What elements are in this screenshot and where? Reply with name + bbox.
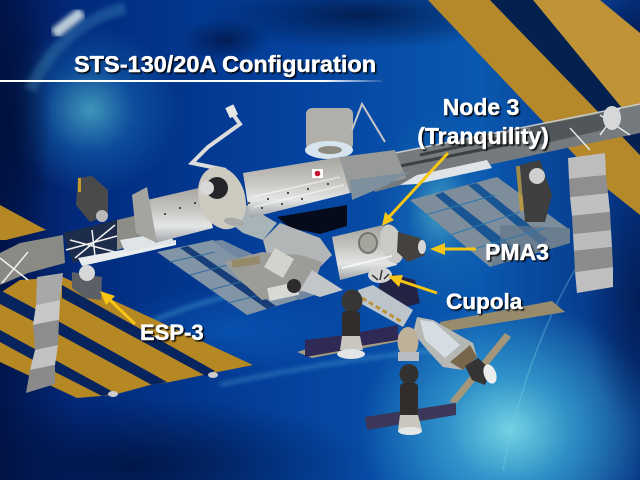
label: ESP-3: ESP-3 [140, 320, 204, 345]
dark structure under Kibo [277, 205, 347, 234]
label: PMA3: PMA3 [485, 239, 549, 265]
robot arm [192, 104, 240, 170]
label: Node 3 (Tranquility): (Tranquility) [417, 123, 549, 149]
radiator panels: left blue-gray [157, 240, 330, 315]
solar array: upper right gold panels [428, 0, 640, 215]
Kibo laboratory with Japanese flag [243, 150, 410, 218]
ESP-3 pallet [72, 265, 102, 300]
radiator: left accordion [26, 273, 63, 393]
arrow: Cupola [388, 275, 437, 293]
arrow: ESP-3 [100, 291, 135, 324]
lower connecting module [217, 203, 277, 240]
camera platform on left truss [76, 176, 108, 222]
arrow: Node 3 [382, 153, 448, 226]
Soyuz spacecraft lower [365, 327, 456, 435]
solar array: lower left gold panels [0, 205, 253, 398]
title rule [0, 80, 382, 82]
title: STS-130/20A Configuration [74, 51, 376, 77]
label: Cupola: Cupola [446, 289, 523, 314]
Russian solar panel behind cupola [378, 272, 420, 310]
Cupola [368, 267, 392, 283]
PMA3 adapter [397, 232, 426, 262]
radiator panels: right blue-gray [410, 177, 570, 267]
lower laboratory module [263, 223, 332, 275]
arrow: PMA3 [430, 243, 476, 255]
truss: left side [0, 213, 176, 285]
Harmony node [190, 160, 254, 236]
label: Node 3 (Tranquility): Node 3 [443, 94, 519, 120]
Node 3 Tranquility module [332, 222, 408, 280]
logistics module [305, 104, 385, 159]
solar array: Russian tan panel [440, 301, 565, 403]
label: Node 3 (Tranquility) [417, 94, 549, 149]
central equipment cluster [224, 248, 343, 301]
Soyuz spacecraft left [297, 290, 400, 359]
Russian segment module [358, 285, 413, 327]
truss: right side [360, 104, 640, 222]
left lab module [132, 187, 213, 243]
service module and progress [413, 317, 499, 385]
radiator: right accordion [568, 153, 613, 293]
